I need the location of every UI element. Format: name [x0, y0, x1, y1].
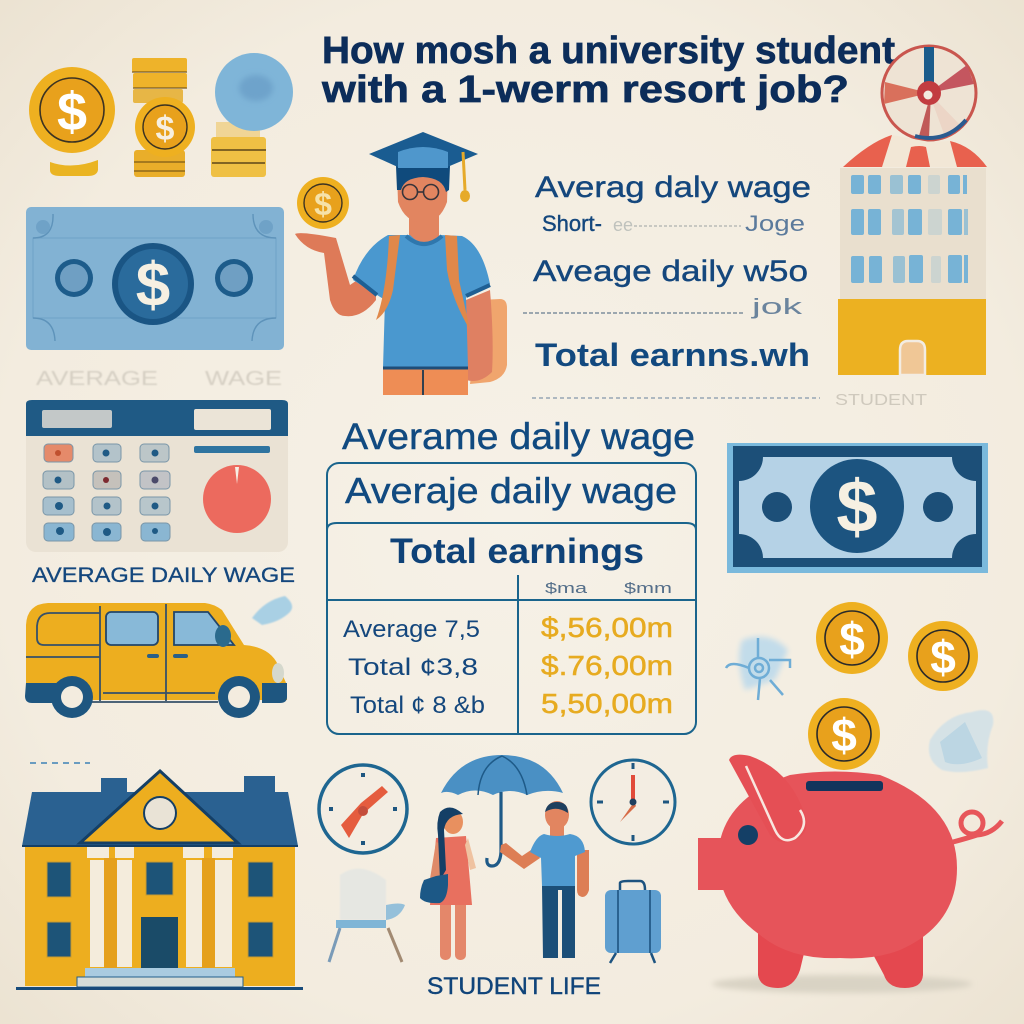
panel: navy banknote: $	[836, 465, 878, 548]
shorts	[383, 368, 468, 395]
icon: coin stack with coin	[132, 58, 195, 177]
columns	[87, 847, 233, 967]
tail	[953, 812, 1002, 842]
text block: job summary: ee	[613, 215, 633, 235]
windows	[851, 175, 968, 283]
raised arm	[295, 233, 376, 316]
hair	[396, 166, 450, 192]
icon: ferris wheel	[882, 46, 976, 140]
panel: earnings table: Total earnings	[390, 532, 644, 571]
panel: earnings table: 5,50,00m	[541, 688, 673, 719]
icon: yellow van	[25, 603, 287, 718]
text block: job summary: Aveage daily w5o	[533, 255, 808, 288]
icon: clock right	[591, 760, 675, 844]
coin	[297, 177, 349, 229]
icon: floating gold coin one	[816, 602, 888, 674]
icon: faded blue sketch	[929, 710, 993, 772]
icon: easel chair sketch	[329, 869, 405, 962]
text block: job summary: jok	[750, 294, 804, 319]
snout	[698, 838, 724, 890]
icon: clock left	[319, 765, 407, 853]
icon: blue coin on stack	[211, 53, 293, 177]
body	[718, 772, 957, 958]
icon: blue swirl	[726, 637, 790, 700]
panel: blue banknote	[26, 207, 284, 350]
panel: earnings table: $,56,00m	[541, 612, 673, 643]
walls	[25, 846, 295, 986]
icon: red piggy bank with coin	[698, 698, 1002, 993]
icon: large gold coin with base	[29, 67, 115, 176]
panel: earnings table: $.76,00m	[541, 650, 673, 681]
faded label: average wage	[36, 368, 282, 390]
right arm	[466, 290, 493, 381]
coin entering slot: $	[831, 709, 857, 761]
panel: blue banknote: $	[136, 251, 170, 320]
panel: earnings table	[327, 416, 696, 734]
icon: woman with bag	[420, 807, 476, 960]
icon: floating gold coin one: $	[839, 613, 865, 665]
legs	[758, 925, 923, 988]
icon: floating gold coin two	[908, 621, 978, 691]
glasses	[402, 184, 438, 200]
head	[397, 172, 448, 223]
icon: blue suitcase	[605, 881, 661, 963]
faded label: student: STUDENT	[835, 392, 927, 409]
panel: earnings table: Total ¢3,8	[348, 654, 478, 681]
coin entering slot	[808, 698, 880, 770]
neck	[409, 212, 439, 248]
icon: large gold coin with base: $	[57, 82, 87, 142]
title	[321, 30, 895, 111]
faded label: average wage: WAGE	[205, 368, 282, 390]
icon: floating gold coin two: $	[930, 631, 956, 683]
slot	[806, 781, 883, 791]
icon: coin stack with coin: $	[156, 110, 175, 148]
eye	[738, 825, 758, 845]
faded label: average wage: AVERAGE	[36, 368, 158, 390]
text block: job summary: Total earnns.wh	[535, 337, 810, 373]
icon: school building	[16, 771, 303, 990]
panel: earnings table: $ma	[545, 580, 588, 597]
text block: job summary: Joge	[745, 211, 805, 236]
door	[141, 917, 178, 970]
backpack	[470, 299, 507, 384]
text block: job summary	[523, 171, 820, 398]
door	[900, 341, 925, 375]
chimneys	[101, 776, 275, 795]
icon: student with graduation cap holding a coin	[295, 132, 507, 395]
windows	[47, 862, 273, 957]
panel: earnings table: Total ¢ 8 &b	[350, 692, 485, 719]
icon: umbrella	[441, 755, 563, 866]
icon: man in blue shirt	[500, 801, 589, 958]
label: average daily wage: AVERAGE DAILY WAGE	[32, 564, 295, 587]
pediment	[80, 771, 238, 843]
awning	[843, 135, 987, 167]
table row text: Averaje daily wage	[345, 470, 677, 511]
text block: job summary: Short-	[542, 211, 602, 236]
panel: earnings table: Average 7,5	[343, 616, 480, 643]
steps	[85, 968, 235, 977]
backpack straps	[376, 235, 470, 330]
shirt	[353, 235, 490, 368]
graduation cap	[369, 132, 478, 202]
label: student life: STUDENT LIFE	[427, 973, 601, 1000]
icon: faded blue scribble	[252, 596, 292, 625]
roof	[22, 792, 298, 846]
ear	[729, 755, 807, 843]
text block: job summary: Averag daly wage	[535, 171, 811, 204]
panel: navy banknote	[727, 443, 988, 573]
panel: calculator	[26, 400, 288, 552]
table heading: Averame daily wage	[342, 416, 695, 457]
keypad	[43, 444, 170, 541]
panel: earnings table: $mm	[624, 580, 672, 597]
coin: $	[314, 186, 332, 222]
title: How mosh a university student	[322, 30, 895, 72]
decorative dashes	[30, 762, 90, 764]
title: with a 1-werm resort job?	[321, 69, 849, 111]
icon: resort hotel building	[838, 135, 987, 375]
